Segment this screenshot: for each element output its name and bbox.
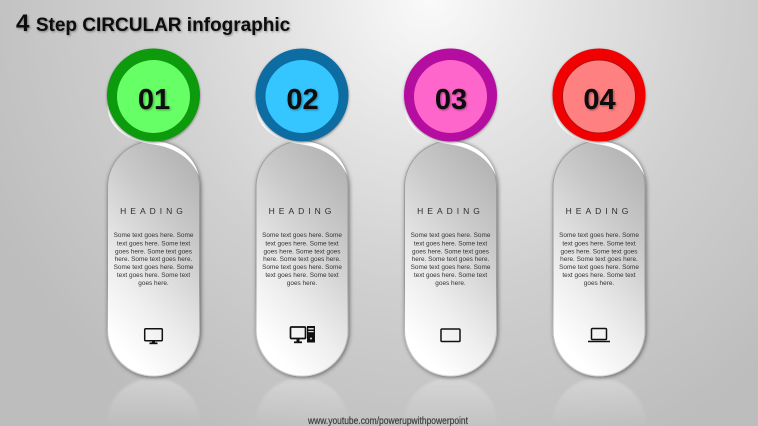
body text: text goes here. Some text xyxy=(562,240,636,248)
badge xyxy=(256,48,348,142)
icon: laptop xyxy=(588,328,610,342)
body text: here. Some text goes here. xyxy=(115,256,193,263)
pill card xyxy=(108,141,200,376)
badge xyxy=(552,48,646,142)
panel: step 04 xyxy=(552,48,646,426)
panel: step 02 xyxy=(256,48,348,426)
body text: text goes here. Some text xyxy=(414,240,487,248)
body text: text goes here. Some text xyxy=(117,272,190,279)
heading: HEADING xyxy=(269,206,335,216)
body text: Some text goes here. Some xyxy=(114,264,194,271)
heading: HEADING xyxy=(120,206,187,216)
panel: step 03 xyxy=(404,48,497,426)
body text: text goes here. Some text xyxy=(265,240,339,248)
icon: monitor xyxy=(145,329,162,343)
body text: text goes here. Some text xyxy=(265,272,339,279)
icon: tablet xyxy=(441,329,460,342)
number: 03 xyxy=(435,84,467,116)
white swoosh xyxy=(107,104,199,176)
body text: goes here. Some text goes xyxy=(264,248,340,256)
body text: here. Some text goes here. xyxy=(560,256,638,263)
badge xyxy=(404,48,497,142)
body text: goes here. xyxy=(584,280,614,287)
body text: goes here. Some text goes xyxy=(412,248,489,256)
white swoosh xyxy=(404,104,496,176)
reflection xyxy=(404,378,497,426)
body text: Some text goes here. Some xyxy=(262,232,342,239)
number: 01 xyxy=(138,84,170,116)
body text: goes here. Some text goes xyxy=(561,248,637,256)
white swoosh xyxy=(553,104,644,176)
pill card xyxy=(553,141,645,376)
body text: text goes here. Some text xyxy=(562,272,636,279)
panel: step 01 xyxy=(107,48,200,426)
body text: text goes here. Some text xyxy=(414,272,487,279)
heading: HEADING xyxy=(417,206,484,216)
pill card xyxy=(256,141,348,376)
body text: Some text goes here. Some xyxy=(559,264,639,271)
body text: goes here. xyxy=(287,280,317,287)
body text: Some text goes here. Some xyxy=(411,264,491,271)
reflection xyxy=(552,378,646,426)
body text: here. Some text goes here. xyxy=(263,256,341,263)
body text: goes here. Some text goes xyxy=(115,248,192,256)
body text: Some text goes here. Some xyxy=(411,232,491,239)
badge xyxy=(107,48,200,142)
body text: text goes here. Some text xyxy=(117,240,190,248)
number: 04 xyxy=(583,84,616,116)
pill card xyxy=(404,141,496,376)
reflection xyxy=(256,378,348,426)
body text: Some text goes here. Some xyxy=(262,264,342,271)
title: 4 Step CIRCULAR infographic xyxy=(16,10,291,37)
body text: goes here. xyxy=(138,280,169,287)
body text: Some text goes here. Some xyxy=(559,232,639,239)
number: 02 xyxy=(286,84,319,116)
body text: goes here. xyxy=(435,280,466,287)
icon: desktop computer xyxy=(290,326,315,342)
body text: here. Some text goes here. xyxy=(412,256,490,263)
heading: HEADING xyxy=(566,206,632,216)
reflection xyxy=(107,378,200,426)
body text: Some text goes here. Some xyxy=(114,232,194,239)
white swoosh xyxy=(256,104,348,176)
